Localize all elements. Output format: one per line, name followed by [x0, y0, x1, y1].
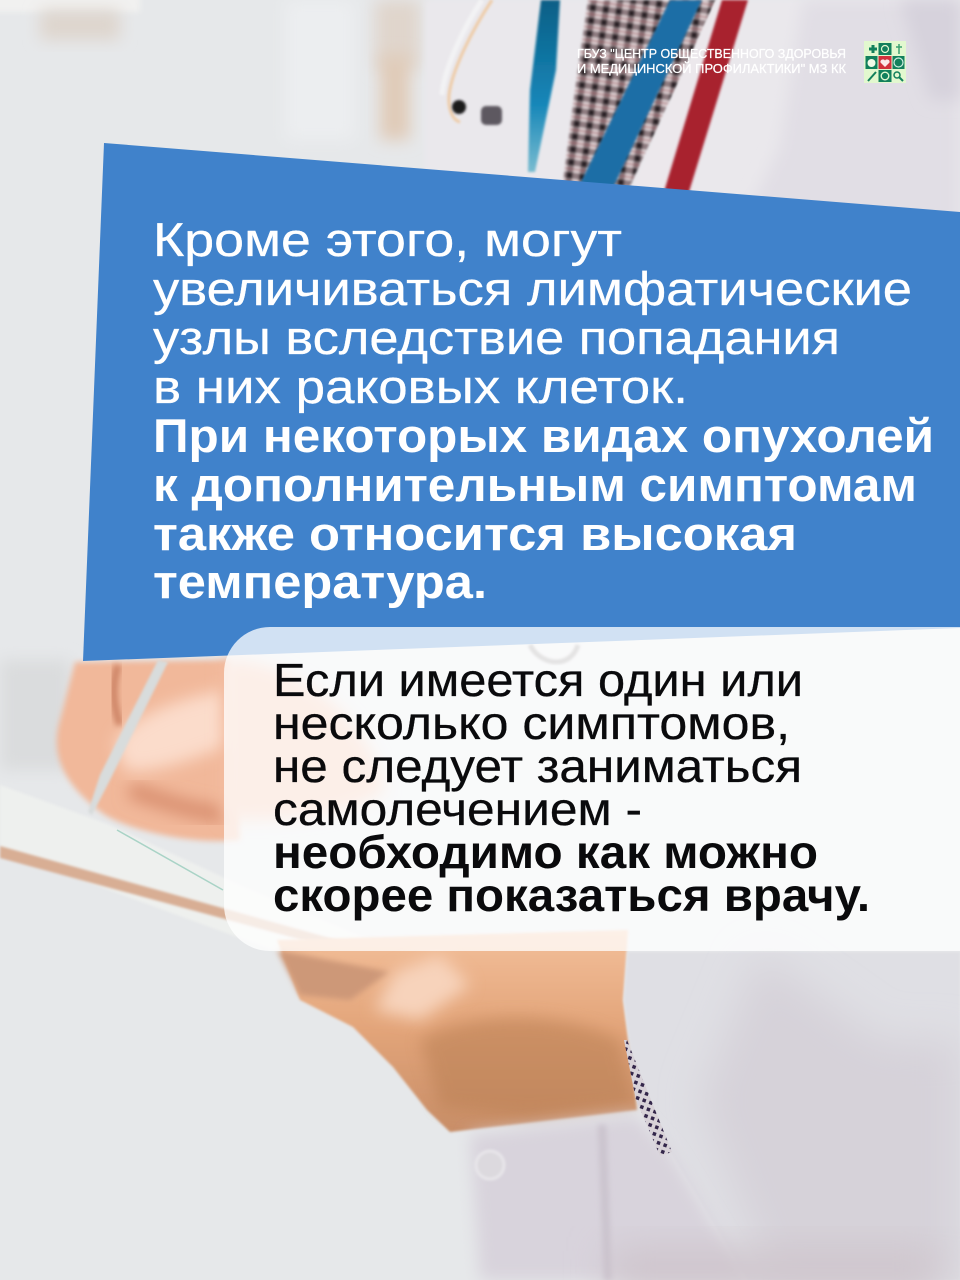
- logo: health icons grid: [864, 41, 906, 83]
- text: bold lines: При некоторых видах опухолей: [153, 409, 934, 462]
- organisation name: И МЕДИЦИНСКОЙ ПРОФИЛАКТИКИ" МЗ КК: [577, 61, 847, 76]
- plus icon: [869, 45, 877, 53]
- coat top: [425, 0, 960, 240]
- red strap: [663, 0, 748, 195]
- upper hand seen through panel: [224, 660, 385, 820]
- text: advice regular: несколько симптомов,: [273, 697, 790, 749]
- lower hand: [277, 930, 637, 1132]
- text: regular lines: [153, 213, 912, 413]
- pen: [88, 660, 168, 815]
- text: regular lines: увеличиваться лимфатические: [153, 262, 912, 315]
- text: advice bold: [273, 826, 870, 921]
- coat sleeve and placket: [470, 952, 960, 1280]
- stethoscope: [442, 0, 502, 125]
- text: bold lines: к дополнительным симптомам: [153, 458, 917, 511]
- text: advice regular: не следует заниматься: [273, 740, 802, 792]
- checked shirt: [562, 0, 716, 190]
- text: advice regular: [273, 654, 803, 835]
- text: regular lines: в них раковых клеток.: [153, 360, 688, 413]
- blue diagonal strap: [577, 0, 702, 190]
- clipboard: [0, 785, 430, 972]
- cuff check edge: [624, 1040, 672, 1156]
- text: bold lines: также относится высокая: [153, 507, 797, 560]
- text: advice regular: самолечением -: [273, 783, 642, 835]
- text: advice bold: необходимо как можно: [273, 826, 818, 878]
- text: advice bold: скорее показаться врачу.: [273, 869, 870, 921]
- white lapel: [630, 0, 722, 195]
- text: advice regular: Если имеется один или: [273, 654, 803, 706]
- panel: translucent advice card: [224, 627, 960, 951]
- text: bold lines: температура.: [153, 555, 487, 608]
- writing hand: [57, 660, 240, 841]
- organisation name: ГБУЗ "ЦЕНТР ОБЩЕСТВЕННОГО ЗДОРОВЬЯ: [577, 47, 846, 61]
- text: regular lines: Кроме этого, могут: [153, 213, 622, 266]
- organisation name: [577, 47, 847, 76]
- panel: blue main statement: [83, 143, 960, 661]
- small ring under panel: [530, 645, 578, 662]
- text: bold lines: [153, 409, 934, 608]
- text: regular lines: узлы вследствие попадания: [153, 311, 840, 364]
- teal lanyard strip: [528, 0, 560, 172]
